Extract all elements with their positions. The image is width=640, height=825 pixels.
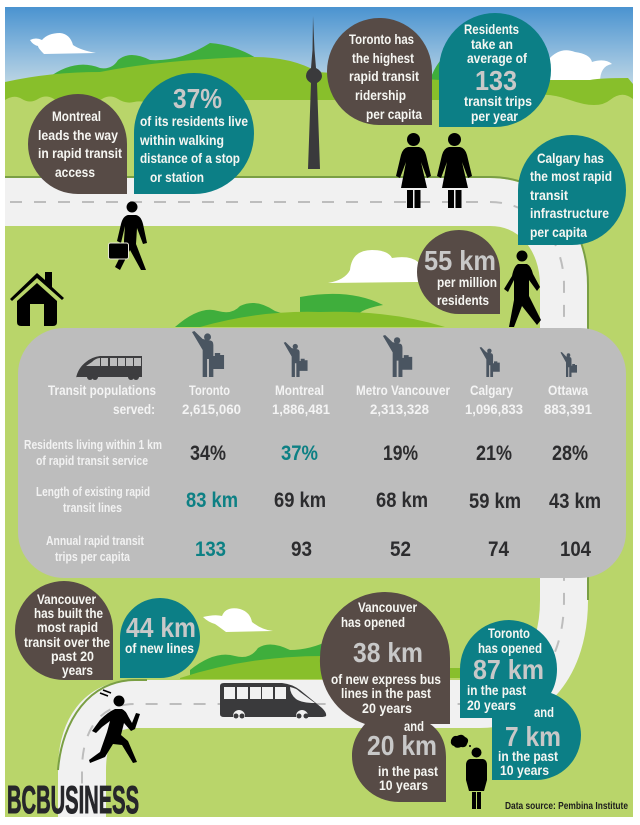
bubble: Residents 133 trips: per year: [471, 108, 518, 124]
row: annual trips per capita: [46, 534, 591, 564]
table header row: Ottawa: [548, 382, 588, 398]
row: length of rapid transit lines: 69 km: [274, 489, 326, 512]
table header row: 1,886,481: [272, 401, 330, 417]
table header row: Metro Vancouver: [356, 382, 450, 398]
bubble: Residents 133 trips: Residents: [464, 21, 519, 37]
table header row: Transit populations: [48, 382, 156, 398]
row: length of rapid transit lines: 59 km: [469, 490, 521, 513]
panel: transit comparison table: [18, 328, 626, 578]
bubble: Toronto 87 km and 7 km: and: [534, 704, 554, 720]
icon: walking person: [504, 250, 541, 327]
bubble: Montreal leads: in rapid transit: [38, 145, 122, 161]
bubble: Vancouver 38 km and 20 km: 20 km: [367, 730, 437, 761]
table header row: 883,391: [544, 401, 592, 417]
bubble: Toronto ridership: per capita: [366, 106, 422, 122]
bubble: Toronto 87 km and 7 km: 10 years: [500, 762, 549, 778]
row: annual trips per capita: 104: [560, 538, 591, 561]
bubble: 37 percent: [134, 73, 254, 194]
bubble: Vancouver most rapid transit: transit over the: [24, 634, 110, 650]
bubble: Residents 133 trips: transit trips: [464, 93, 532, 109]
row: residents within 1 km: 21%: [476, 442, 512, 465]
icon: bus on road: [220, 683, 326, 722]
bubble: 37 percent: of its residents live: [140, 113, 248, 129]
bubble: 55 km per million: per million: [437, 274, 497, 290]
bubble: Residents 133 trips: average of: [467, 50, 527, 66]
row: annual trips per capita: 74: [488, 538, 509, 561]
bubble: Vancouver most rapid transit: most rapid: [37, 619, 98, 635]
bubble: 44 km of new lines: [120, 598, 200, 678]
bubble: 44 km of new lines: 44 km: [126, 612, 196, 643]
icon: walking man with briefcase: [108, 202, 147, 270]
icon: running man: [89, 690, 140, 763]
bubble: Vancouver 38 km and 20 km: has opened: [341, 614, 405, 630]
bubble: Calgary infrastructure: infrastructure: [530, 205, 609, 221]
bubble: 37 percent: within walking: [139, 132, 224, 148]
bubble: Vancouver 38 km and 20 km: in the past: [378, 763, 438, 779]
hills: top background: [48, 43, 320, 80]
bubble: Vancouver 38 km and 20 km: of new express bus: [331, 671, 441, 687]
table header row: served:: [113, 401, 155, 417]
bubble: Toronto 87 km and 7 km: 7 km: [505, 721, 561, 752]
bubble: Toronto ridership: ridership: [355, 87, 406, 103]
row: residents within 1 km: Residents living within 1 km: [24, 438, 162, 452]
table header row: Calgary: [470, 382, 513, 398]
bubble: Calgary infrastructure: the most rapid: [530, 168, 612, 184]
icon: CN Tower: [306, 16, 322, 169]
table header row: [48, 382, 592, 417]
bubble: Montreal leads: [28, 94, 127, 194]
row: length of rapid transit lines: transit lines: [63, 501, 122, 515]
bubble: Toronto 87 km and 7 km: 20 years: [467, 697, 516, 713]
bubble: Toronto 87 km and 7 km: 87 km: [473, 654, 544, 685]
cloud: top right: [548, 50, 612, 83]
row: length of rapid transit lines: [36, 485, 601, 515]
bubble: Toronto ridership: [327, 18, 432, 125]
bubble: Toronto ridership: rapid transit: [349, 68, 419, 84]
bubble: Toronto 87 km and 7 km: has opened: [478, 640, 542, 656]
bubble: Vancouver 38 km and 20 km: [320, 592, 450, 802]
row: length of rapid transit lines: 43 km: [549, 490, 601, 513]
bubble: Toronto ridership: Toronto has: [349, 31, 414, 47]
icon: house: [10, 272, 64, 326]
table header row: 2,313,328: [370, 401, 429, 417]
row: length of rapid transit lines: 68 km: [376, 489, 428, 512]
bubble: Toronto ridership: the highest: [352, 50, 414, 66]
table header row: 1,096,833: [465, 401, 523, 417]
row: residents within 1 km: 37%: [281, 442, 318, 465]
cloud: lower: [203, 608, 273, 632]
bubble: Residents 133 trips: 133: [475, 65, 517, 96]
table header row: Montreal: [275, 382, 324, 398]
icon: standing woman: [466, 748, 487, 809]
bubble: Vancouver most rapid transit: years: [62, 662, 93, 678]
row: annual trips per capita: 133: [195, 538, 226, 561]
bubble: Residents 133 trips: [439, 13, 551, 127]
bubble: Vancouver most rapid transit: past 20: [51, 648, 94, 664]
bubble: Vancouver 38 km and 20 km: 20 years: [362, 700, 412, 716]
bubble: Vancouver 38 km and 20 km: Vancouver: [358, 599, 417, 615]
row: annual trips per capita: Annual rapid transit: [46, 534, 145, 548]
icon: bus in table: [76, 356, 142, 380]
bubble: Toronto 87 km and 7 km: Toronto: [488, 625, 530, 641]
icon: two women: [396, 133, 472, 208]
bubble: Montreal leads: Montreal: [52, 108, 101, 124]
cloud: middle: [328, 250, 418, 283]
row: residents within 1 km: 34%: [190, 442, 226, 465]
row: residents within 1 km: [24, 438, 588, 468]
row: residents within 1 km: 28%: [552, 442, 588, 465]
bubble: Toronto 87 km and 7 km: in the past: [498, 748, 558, 764]
bubble: Vancouver most rapid transit: Vancouver: [37, 591, 96, 607]
bubble: 55 km per million: 55 km: [424, 245, 496, 276]
cloud: top left: [30, 33, 96, 54]
bubble: Calgary infrastructure: per capita: [530, 224, 587, 240]
bubble: Calgary infrastructure: transit: [530, 187, 568, 203]
bubble: Calgary infrastructure: Calgary has: [537, 150, 604, 166]
logo: BCBUSINESS: BCBUSINESS: [7, 779, 139, 822]
bubble: Toronto 87 km and 7 km: in the past: [467, 682, 526, 698]
sky: [5, 7, 633, 107]
hills: lower: [180, 640, 466, 679]
icons: passengers scaled by population: [192, 331, 577, 377]
bubble: 55 km per million: [417, 230, 500, 314]
bubble: Toronto 87 km and 7 km: [460, 620, 581, 780]
bubble: Vancouver 38 km and 20 km: 10 years: [379, 777, 428, 793]
table header row: 2,615,060: [182, 401, 241, 417]
bubble: Vancouver most rapid transit: has built the: [34, 605, 103, 621]
bubble: Vancouver 38 km and 20 km: 38 km: [353, 637, 423, 668]
bubble: Vancouver most rapid transit: [15, 581, 113, 680]
row: annual trips per capita: 93: [291, 538, 312, 561]
row: annual trips per capita: 52: [390, 538, 411, 561]
row: annual trips per capita: trips per capita: [55, 550, 131, 564]
bubble: 37 percent: 37%: [173, 83, 222, 114]
bubble: 37 percent: or station: [150, 169, 204, 185]
bubble: Vancouver 38 km and 20 km: and: [404, 718, 424, 734]
bubble: Residents 133 trips: take an: [471, 36, 513, 52]
row: length of rapid transit lines: Length of existing rapid: [36, 485, 150, 499]
bubble: Calgary infrastructure: [518, 135, 626, 245]
bubble: Vancouver 38 km and 20 km: lines in the past: [341, 685, 431, 701]
road: [0, 177, 588, 825]
row: length of rapid transit lines: 83 km: [186, 489, 238, 512]
scalloped lawn edge: [5, 95, 633, 112]
bubble: Montreal leads: access: [55, 164, 95, 180]
bubble: Montreal leads: leads the way: [38, 127, 118, 143]
bubble: 55 km per million: residents: [437, 292, 489, 308]
hills: top foreground: [5, 57, 633, 106]
row: residents within 1 km: of rapid transit service: [36, 454, 148, 468]
icon: thought cloud: [451, 735, 471, 748]
row: residents within 1 km: 19%: [383, 442, 418, 465]
bubble: 44 km of new lines: of new lines: [125, 640, 194, 656]
bubble: 37 percent: distance of a stop: [140, 150, 240, 166]
hills: middle: [175, 303, 300, 327]
table header row: Toronto: [189, 382, 230, 398]
